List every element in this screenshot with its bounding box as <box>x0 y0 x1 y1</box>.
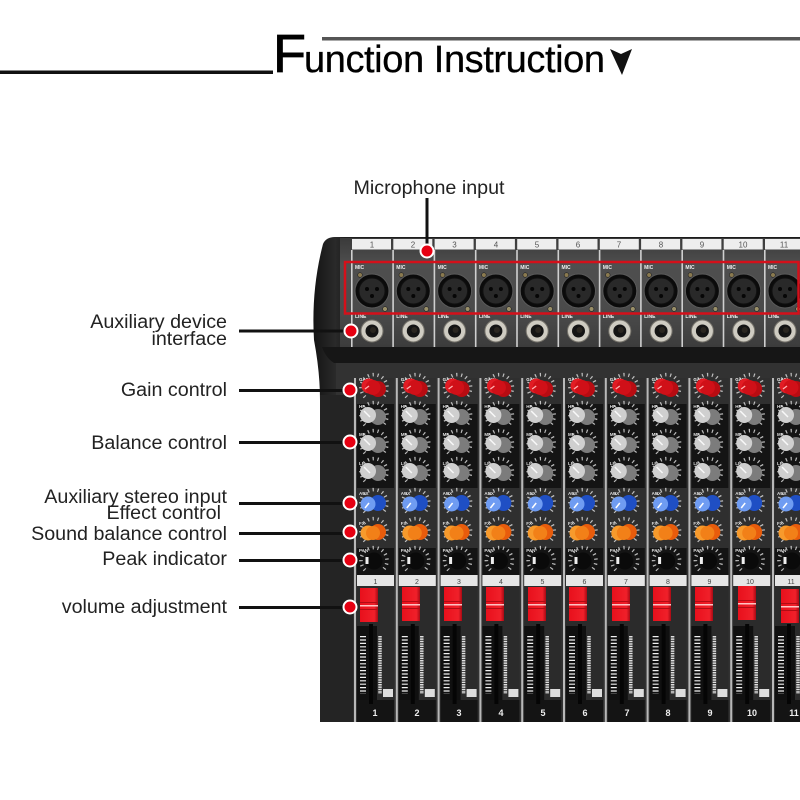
channel number strip: 10 <box>739 240 748 250</box>
left body strip <box>320 395 353 722</box>
bottom channel numbers: 7 <box>624 708 630 718</box>
fader strip numbers: 8 <box>666 579 670 586</box>
bottom channel numbers <box>372 708 799 718</box>
bottom channel numbers: 8 <box>665 708 671 718</box>
callout: Gain control <box>121 379 356 401</box>
callout: Auxiliary stereo input <box>44 486 356 510</box>
lower control plate <box>336 363 800 722</box>
bottom channel numbers: 5 <box>540 708 546 718</box>
channel number strip: 7 <box>617 240 622 250</box>
fader strip numbers: 4 <box>499 579 503 586</box>
bottom channel numbers: 9 <box>707 708 713 718</box>
bottom channel numbers: 4 <box>498 708 504 718</box>
red fader caps <box>360 586 799 623</box>
fader strip numbers: 6 <box>583 579 587 586</box>
callout: Peak indicator <box>102 548 356 570</box>
channel number strip: 8 <box>659 240 664 250</box>
channel number strip: 11 <box>780 240 789 250</box>
fader strip numbers: 1 <box>374 579 378 586</box>
channel number strip <box>352 239 800 250</box>
callout: Sound balance control: Sound balance control <box>31 523 227 545</box>
callout: Balance control: Balance control <box>91 432 227 454</box>
callout: Auxiliary device interface: interface <box>151 328 227 350</box>
bottom channel numbers: 6 <box>582 708 588 718</box>
channel number strip: 4 <box>494 240 499 250</box>
channel number strip: 5 <box>535 240 540 250</box>
channel number strip: 2 <box>411 240 416 250</box>
fader strip numbers: 11 <box>787 579 795 586</box>
fader strip numbers: 2 <box>415 579 419 586</box>
title: Function Instruction heading: unction Instruction <box>304 39 605 81</box>
callout: Microphone input: Microphone input <box>353 177 505 199</box>
fader strip numbers: 3 <box>457 579 461 586</box>
bottom channel numbers: 1 <box>372 708 378 718</box>
callout: Auxiliary device interface: Auxiliary device <box>90 311 227 333</box>
callout: Effect control: Effect control <box>106 502 221 524</box>
channel number strip: 6 <box>576 240 581 250</box>
fader strip numbers: 5 <box>541 579 545 586</box>
callout: Sound balance control <box>31 523 356 545</box>
callout: Peak indicator: Peak indicator <box>102 548 227 570</box>
callout: Auxiliary stereo input: Auxiliary stereo input <box>44 486 228 508</box>
fader strip numbers: 9 <box>708 579 712 586</box>
fader strip numbers <box>374 579 795 586</box>
title: Function Instruction heading <box>0 24 800 84</box>
callout: Balance control <box>91 432 356 454</box>
callout: volume adjustment <box>62 596 356 618</box>
input jack channels <box>351 250 800 347</box>
bottom channel numbers: 2 <box>414 708 420 718</box>
title: Function Instruction heading: F <box>273 24 306 84</box>
channel strips with knobs <box>354 375 800 722</box>
callout: volume adjustment: volume adjustment <box>62 596 228 618</box>
bottom channel numbers: 11 <box>789 708 799 718</box>
channel number strip: 1 <box>370 240 375 250</box>
dark divider band <box>322 347 800 363</box>
bottom channel numbers: 10 <box>747 708 757 718</box>
channel number strip: 9 <box>700 240 705 250</box>
callout: Gain control: Gain control <box>121 379 227 401</box>
mixer body <box>313 237 800 722</box>
bottom channel numbers: 3 <box>456 708 462 718</box>
callout: Auxiliary device interface <box>90 311 358 350</box>
upper input plate <box>340 238 800 347</box>
fader strip numbers: 7 <box>624 579 628 586</box>
fader strip numbers: 10 <box>746 579 754 586</box>
callout: Microphone input <box>353 177 505 258</box>
channel number strip: 3 <box>452 240 457 250</box>
mixer console photo <box>313 237 800 722</box>
red highlight frame around microphone inputs <box>345 262 798 314</box>
